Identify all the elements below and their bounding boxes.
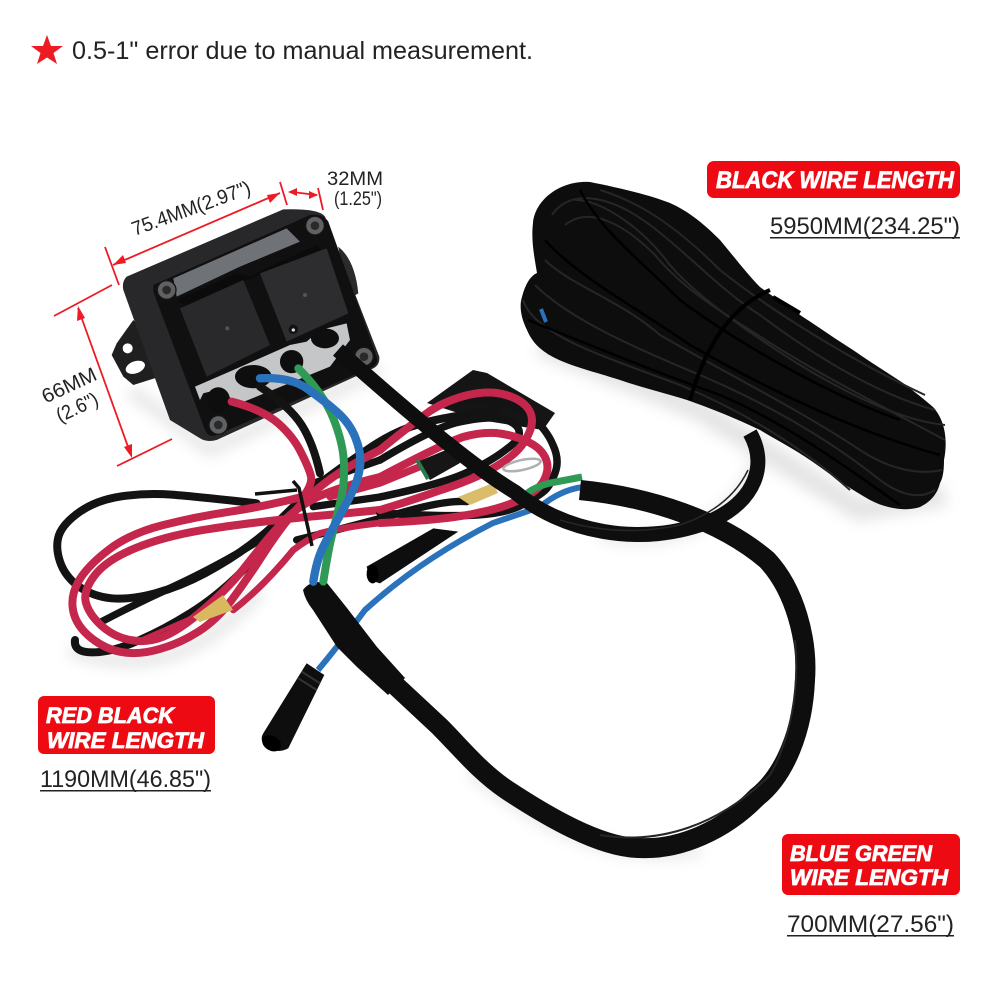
dimension: height: (2.6") xyxy=(53,389,102,427)
cable tie on coil xyxy=(690,290,800,400)
dimensions xyxy=(38,169,383,466)
left wire bundle xyxy=(57,410,497,653)
callout: blue green wire length xyxy=(782,834,960,938)
box face xyxy=(153,215,377,436)
side tab xyxy=(338,247,358,300)
dark tag plate xyxy=(427,370,555,430)
note text: 0.5-1" error due to manual measurement. xyxy=(72,37,533,65)
callout: blue green wire length: WIRE LENGTH xyxy=(790,865,949,890)
screws xyxy=(157,216,373,434)
control box xyxy=(112,209,379,441)
note: measurement error xyxy=(31,35,533,65)
right wire bundle xyxy=(380,392,557,523)
right relay xyxy=(260,248,348,342)
grommets xyxy=(207,387,230,413)
left relay xyxy=(180,280,270,377)
callout: blue green wire length: BLUE GREEN xyxy=(790,841,933,866)
sheath taper xyxy=(303,582,405,695)
callout: red black wire length xyxy=(38,696,215,793)
dimension: depth xyxy=(288,169,383,210)
small black connector xyxy=(367,528,458,583)
dimension: depth: (1.25") xyxy=(334,189,382,210)
mounting tab xyxy=(112,320,170,385)
dimension: height: 66MM xyxy=(38,364,100,408)
dimension: width xyxy=(105,177,287,285)
green and blue leads xyxy=(318,477,583,670)
icon: red star xyxy=(31,35,63,64)
callout: red black wire length: RED BLACK xyxy=(46,703,176,728)
black wire coil xyxy=(521,182,946,509)
blue wire tip in coil xyxy=(541,309,546,322)
callout: blue green wire length: 700MM(27.56") xyxy=(787,911,954,938)
ring terminal xyxy=(502,456,542,474)
callout: red black wire length: 1190MM(46.85") xyxy=(40,766,211,793)
dimension: width: 75.4MM(2.97") xyxy=(129,177,254,241)
callout: black wire length: BLACK WIRE LENGTH xyxy=(716,167,955,194)
inline connector xyxy=(417,447,460,480)
cable tie xyxy=(255,481,312,546)
terminal strip xyxy=(195,323,350,403)
soft shadows xyxy=(70,345,945,853)
loop highlight xyxy=(560,470,748,530)
callout: black wire length: 5950MM(234.25") xyxy=(770,213,960,240)
callout: red black wire length: WIRE LENGTH xyxy=(47,728,205,753)
blue connector plug xyxy=(259,663,324,755)
black sheath xyxy=(395,490,805,848)
sheath highlight xyxy=(600,640,796,838)
yellow connector left xyxy=(193,595,233,622)
thick black wire loop xyxy=(338,350,758,535)
box body xyxy=(123,209,379,441)
dimension: height xyxy=(38,285,172,466)
yellow connector right xyxy=(458,483,498,505)
wires from box xyxy=(232,368,360,582)
callout: black wire length xyxy=(707,161,960,240)
dimension: depth: 32MM xyxy=(327,169,383,190)
